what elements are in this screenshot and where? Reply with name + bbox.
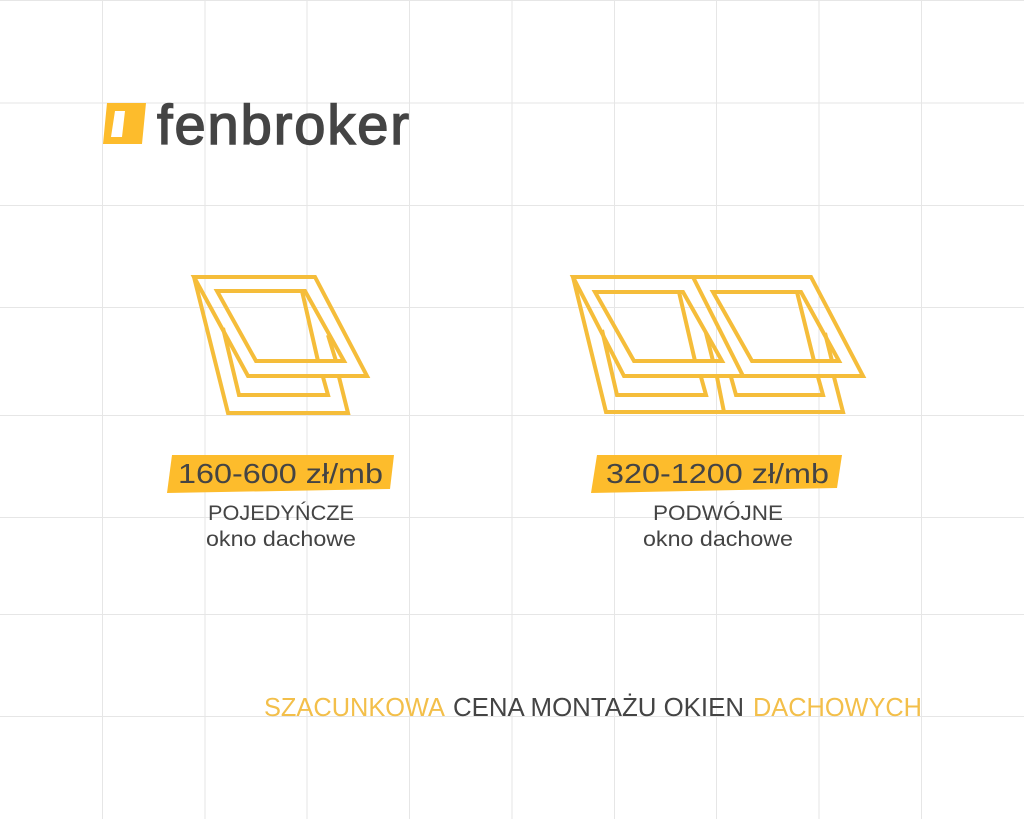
price tag: single: 160-600 zł/mb bbox=[178, 458, 383, 489]
label: single window type: okno dachowe bbox=[206, 528, 356, 551]
logo wordmark: fenbroker bbox=[157, 93, 409, 156]
label: double window type: okno dachowe bbox=[643, 528, 793, 551]
panel: double roof window bbox=[573, 277, 863, 551]
label: single window type bbox=[206, 502, 356, 551]
label: double window type bbox=[643, 502, 793, 551]
caption: DACHOWYCH bbox=[753, 692, 922, 722]
caption: SZACUNKOWA bbox=[264, 692, 446, 722]
price tag: double: 320-1200 zł/mb bbox=[606, 458, 829, 489]
caption: CENA MONTAŻU OKIEN bbox=[453, 692, 744, 722]
label: single window type: POJEDYŃCZE bbox=[208, 502, 354, 525]
panel: single roof window bbox=[167, 277, 394, 551]
icon: logo window mark bbox=[103, 103, 146, 144]
icon: double roof window bbox=[573, 277, 863, 412]
logo: fenbroker bbox=[103, 93, 409, 156]
price tag: single bbox=[167, 455, 394, 493]
label: double window type: PODWÓJNE bbox=[653, 502, 783, 525]
caption bbox=[264, 692, 922, 722]
price tag: double bbox=[591, 455, 842, 493]
icon: single roof window bbox=[194, 277, 367, 413]
